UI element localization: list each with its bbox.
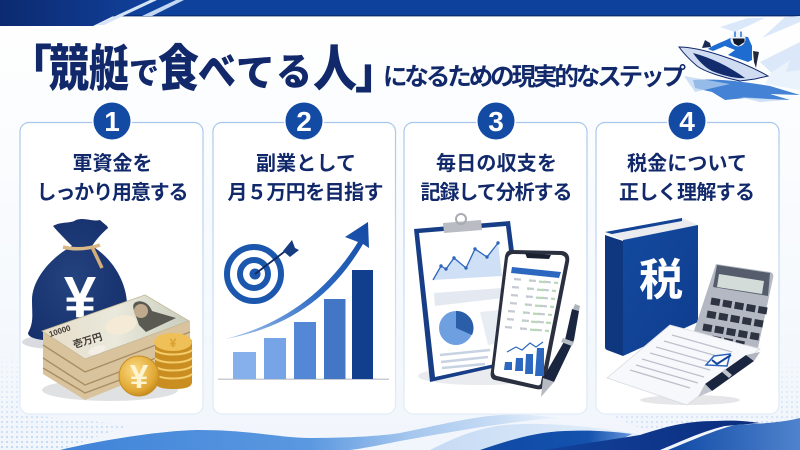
heading: step 2 [228, 152, 384, 204]
heading: step 1: 軍資金を [72, 152, 152, 175]
icon: clipboard with charts [414, 214, 542, 385]
number badge 2 [284, 101, 324, 141]
heading: step 2: 月５万円を目指す [228, 181, 384, 204]
number badge 1 [92, 101, 132, 141]
icon: gold coins: ¥ [130, 358, 149, 395]
arrow: growth curve [225, 222, 369, 339]
number badge 1: 1 [104, 106, 120, 137]
bar chart [218, 270, 389, 380]
heading: step 2: 副業として [256, 152, 356, 175]
icon: calculator [694, 264, 773, 348]
icon: gold coins [119, 333, 192, 396]
heading: step 3 [420, 152, 572, 204]
number badge 4 [667, 101, 707, 141]
heading: step 3: 記録して分析する [420, 181, 572, 204]
icon: stack of banknotes: 10000 [48, 323, 72, 339]
title: 食 [158, 41, 199, 97]
number badge 4: 4 [679, 106, 695, 137]
panel: step 2 [213, 101, 396, 414]
heading: step 4: 税金について [627, 152, 747, 175]
header band [0, 0, 800, 26]
heading: step 1 [36, 152, 188, 204]
icon: fountain pen [698, 352, 760, 397]
title: 」 [355, 49, 399, 98]
title: で [129, 55, 159, 91]
title: になるための現実的なステップ [383, 63, 686, 91]
halftone dots: lower right [616, 371, 798, 428]
icon: stack of banknotes: 壱万円 [71, 330, 104, 351]
bottom waves [60, 415, 800, 450]
panel: step 4 [596, 101, 779, 414]
number badge 3: 3 [488, 106, 504, 137]
title: る [276, 52, 312, 94]
icon: tax book: 税 [639, 244, 683, 308]
heading: step 1: しっかり用意する [36, 181, 188, 204]
icon: money bag: ¥ [64, 265, 96, 330]
heading: step 4 [619, 152, 755, 204]
icon: tax document [607, 325, 760, 405]
icon: target [227, 240, 299, 301]
panel: step 3 [404, 101, 587, 414]
title: 「 [8, 42, 52, 91]
icon: money bag [22, 219, 127, 349]
heading: step 3: 毎日の収支を [436, 152, 557, 175]
icon: smartphone [491, 250, 569, 389]
number badge 3 [476, 101, 516, 141]
title: 人 [313, 41, 357, 97]
icon: gold coins: ¥ [170, 336, 177, 350]
title [8, 41, 686, 98]
number badge 2: 2 [296, 106, 312, 137]
icon: tax book [605, 218, 698, 356]
title: 艇 [89, 41, 129, 97]
icon: stack of banknotes [42, 295, 190, 401]
panel: step 1 [20, 101, 203, 414]
illustration: racing boat [679, 16, 800, 102]
halftone dots: lower left [1, 366, 127, 448]
title: べ [198, 48, 236, 95]
heading: step 4: 正しく理解する [619, 181, 755, 204]
icon: pen [541, 304, 580, 397]
title: て [236, 53, 275, 95]
title: 競 [49, 41, 89, 97]
